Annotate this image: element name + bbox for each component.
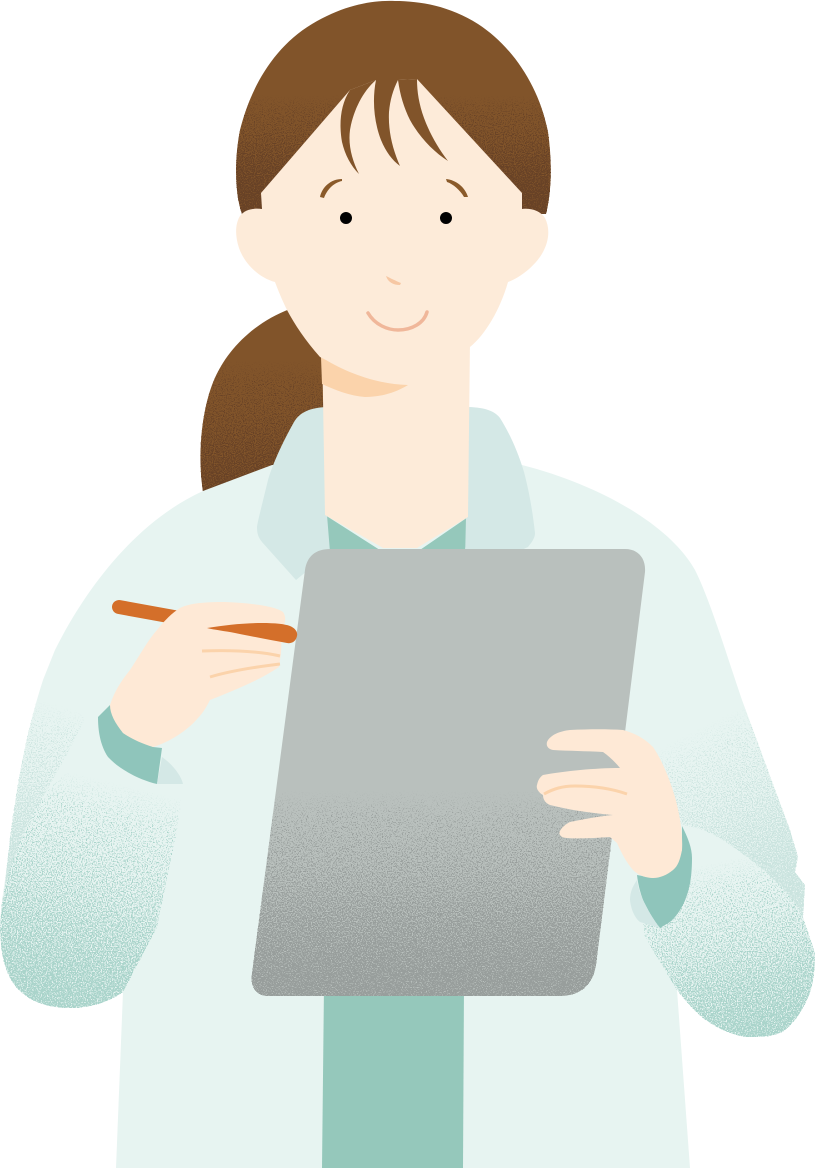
lab coat (0, 465, 815, 1168)
bang strand 2 (374, 80, 400, 166)
sleeve shading: right upper arm (653, 700, 805, 917)
right hand finger line (544, 786, 627, 794)
pen rear section (119, 607, 185, 619)
right hand (537, 729, 682, 878)
head hair (236, 1, 551, 214)
nose (386, 276, 401, 285)
neckline undershirt (325, 515, 468, 552)
left hand finger lines (202, 651, 280, 677)
mouth (368, 312, 427, 330)
bang strand 1 (341, 80, 376, 174)
neck shadow (321, 357, 408, 397)
undershirt lower panel (322, 985, 464, 1168)
right eyebrow (446, 179, 468, 197)
right eye (440, 212, 452, 224)
right collar (465, 407, 535, 560)
left eyebrow (320, 179, 342, 198)
left cuff shade (157, 757, 183, 784)
ponytail (200, 309, 330, 492)
left collar (257, 407, 330, 580)
sleeve shading: left upper arm (5, 700, 85, 887)
pen front section (207, 623, 297, 643)
left cuff (98, 705, 162, 784)
face and ears (236, 79, 548, 376)
right cuff shade (630, 880, 660, 928)
sleeve shading: left forearm (0, 762, 182, 1008)
right cuff (637, 826, 692, 928)
bang strand 3 (398, 79, 448, 161)
left hand (110, 602, 285, 747)
neck (322, 340, 470, 548)
left eye (340, 212, 352, 224)
clipboard (252, 549, 645, 996)
sleeve shading: right forearm (640, 825, 815, 1037)
